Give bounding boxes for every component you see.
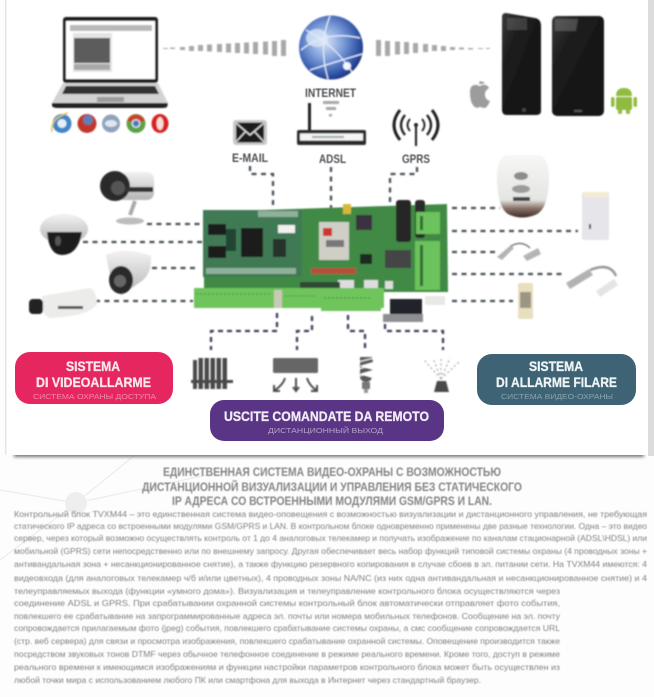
- bullet camera: [100, 171, 154, 224]
- Android phone: [552, 16, 604, 116]
- connection dashes: [83, 166, 578, 301]
- body text: повлекшего ее срабатывание на запрограммированные адреса эл. почты или номера мобильных телефонов. Сообщение на эл. почту: [14, 612, 561, 621]
- panel: wired alarm system: SISTEMA: [529, 359, 583, 374]
- icon: radiator: [191, 358, 233, 389]
- board components: [311, 268, 356, 274]
- panel: video alarm system: DI VIDEOALLARME: [36, 375, 151, 390]
- icon: bulb: [358, 357, 374, 393]
- illustration group: [29, 13, 637, 393]
- GSM module: [319, 222, 349, 260]
- laptop: [52, 17, 168, 108]
- heading: [142, 467, 522, 508]
- body text: мобильной (GPRS) сети непосредственно или по внешнему запросу. Другая обеспечивает весь набор функций типовой системы охраны (4 проводных зоны +: [14, 547, 647, 556]
- signal dashes: globe to phones: [376, 40, 490, 56]
- label: adsl: ADSL: [319, 152, 346, 166]
- right terminal blocks: [416, 212, 440, 234]
- dome camera 2: [106, 251, 151, 295]
- bottom connectors: [194, 288, 384, 308]
- heading: ЕДИНСТВЕННАЯ СИСТЕМА ВИДЕО-ОХРАНЫ С ВОЗМОЖНОСТЬЮ: [163, 467, 501, 479]
- body text: реального времени к имеющимся изображениям и функции настройки параметров контрольного блока может быть осуществлен из: [14, 663, 560, 672]
- iPhone: [502, 13, 541, 115]
- globe: [299, 16, 363, 80]
- browser icons: [52, 113, 168, 133]
- panel: remote outputs: [210, 400, 444, 441]
- router: [297, 103, 366, 145]
- label: internet: INTERNET: [305, 86, 357, 100]
- daughter board: [203, 210, 302, 277]
- dome camera 1: [40, 214, 88, 255]
- heading: IP АДРЕСА СО ВСТРОЕННЫМИ МОДУЛЯМИ GSM/GPRS И LAN.: [172, 496, 492, 508]
- panel: wired alarm system: DI ALLARME FILARE: [496, 375, 617, 390]
- main white card: [6, 0, 648, 455]
- panel: wired alarm system: СИСТЕМА ВИДЕО-ОХРАНЫ: [501, 392, 613, 401]
- body text: [14, 510, 647, 685]
- body text: Контрольный блок TVXM44 – это единственная система видео-оповещения с возможностью визуализации и дистанционного управления, не требующая: [14, 510, 647, 519]
- panel: remote outputs: ДИСТАНЦИОННЫЙ ВЫХОД: [268, 426, 383, 435]
- icon: sprinkler: [424, 357, 460, 392]
- body text: посредством звуковых тонов DTMF через обычное телефонное соединение в режиме реального времени. Кроме того, доступ в режиме: [14, 650, 560, 659]
- icon: apple: [470, 81, 490, 108]
- panel: remote outputs: USCITE COMANDATE DA REMOTO: [224, 409, 429, 424]
- control board: [194, 200, 448, 322]
- body text: антивандальная зона + несанкционированное снятие), а также функцию резервного копирования в случае сбоев в эл. питании сети. На TVXM44 имеются: 4: [14, 560, 647, 569]
- output dashes: [211, 313, 443, 350]
- vibration sensors: [566, 267, 618, 297]
- panel: video alarm system: СИСТЕМА ОХРАНЫ ДОСТУПА: [33, 392, 156, 401]
- label: gprs: GPRS: [402, 152, 430, 166]
- body text: статического IP адреса со встроенными модулями GSM/GPRS и LAN. В контрольном блоке одновременно применены две разные технологии. Одна – это видео: [14, 522, 647, 531]
- panel: wired alarm system: [477, 354, 636, 405]
- faint background network: [0, 455, 230, 560]
- icon: air conditioner: [273, 358, 318, 391]
- capacitors: [396, 200, 411, 242]
- body text: телеуправляемых выхода (функции «умного дома»). Визуализация и телеуправление контрольного блока осуществляются через: [14, 587, 560, 596]
- siren: [497, 155, 549, 218]
- heading: ДИСТАНЦИОННОЙ ВИЗУАЛИЗАЦИИ И УПРАВЛЕНИЯ БЕЗ СТАТИЧЕСКОГО: [142, 481, 522, 494]
- card bottom shadow: [14, 452, 644, 457]
- serial port: [390, 299, 422, 315]
- body text: (стр. веб сервера) для связи и просмотра изображения, повлекшего срабатывание охранной системы. Оповещение производится также: [14, 637, 560, 646]
- icon: e-mail: [233, 120, 267, 145]
- PIR sensor: [582, 192, 609, 240]
- box camera: [29, 288, 97, 318]
- beige contact: [518, 283, 533, 319]
- card left edge: [5, 0, 6, 455]
- magnetic contacts: [497, 243, 541, 261]
- internet to router signal: [323, 101, 339, 116]
- signal dashes: laptop to globe: [163, 40, 286, 56]
- body text: соединение ADSL и GPRS. При срабатывании охранной системы контрольный блок автоматически отправляет фото события,: [14, 599, 560, 608]
- body text: сопровождается прилагаемым фото (jpeg) события, повлекшего срабатывание системы охраны, а смс сообщение сопровождается URL: [14, 624, 560, 633]
- label: e-mail: E-MAIL: [232, 151, 268, 165]
- body text: видеовхода (для аналоговых телекамер ч/б и/или цветных), 4 проводных зоны NA/NC (из них одна антивандальная и несанкционированное снятие) и 4: [14, 574, 647, 583]
- body text: сервер, через который возможно осуществлять контроль от 1 до 4 аналоговых телекамер и получать изображение по каналам стационарной (ADSL\HDSL) или: [14, 534, 647, 543]
- device labels: [232, 86, 430, 166]
- panel: video alarm system: SISTEMA: [66, 359, 120, 374]
- body text: любой точки мира с использованием любого ПК или смартфона для выхода в Интернет через стандартный браузер.: [14, 676, 481, 685]
- card right edge: [648, 0, 654, 456]
- icon: android: [611, 88, 637, 114]
- icon: GPRS antenna: [394, 110, 438, 146]
- panel: video alarm system: [15, 352, 173, 404]
